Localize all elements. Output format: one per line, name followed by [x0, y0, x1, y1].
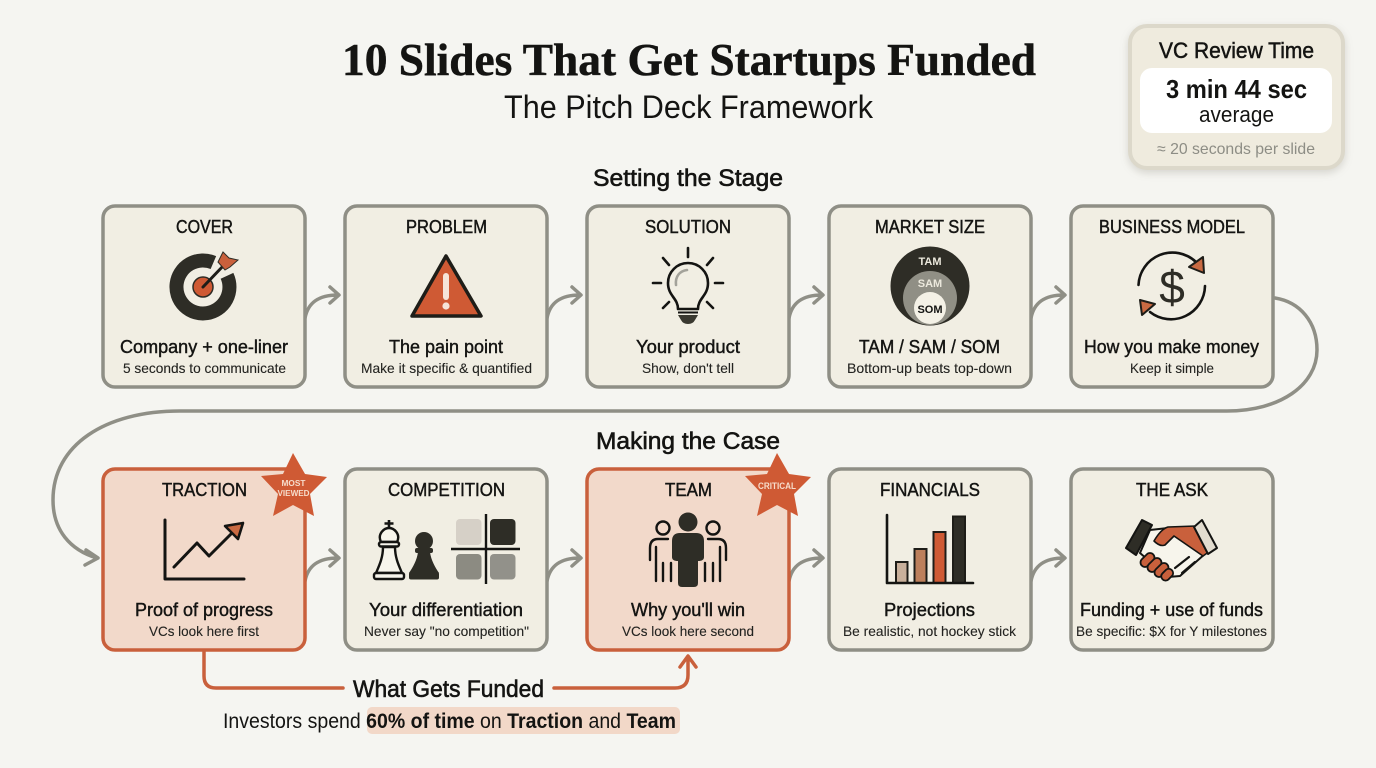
- icon: TAM SAM SOM nested circles: SAM: [918, 278, 942, 290]
- heading: what gets funded: What Gets Funded: [353, 676, 544, 703]
- badge: most viewed star: MOST: [282, 479, 306, 488]
- badge: critical star: CRITICAL: [758, 481, 796, 491]
- panel: cover: [103, 206, 305, 387]
- subtitle: The Pitch Deck Framework: [504, 89, 874, 125]
- panel: team: [587, 453, 811, 650]
- icon: bar chart: [887, 515, 973, 583]
- icon: dollar cycle: $: [1159, 261, 1185, 313]
- arrow: solution to market size: [789, 287, 823, 318]
- icon: growth chart: [165, 520, 244, 579]
- card heading: FINANCIALS: [880, 480, 980, 500]
- icon: chess pieces: [374, 520, 439, 580]
- icon: team people: [650, 512, 726, 587]
- callout heading: VC Review Time: [1159, 38, 1314, 63]
- card heading: MARKET SIZE: [875, 217, 985, 237]
- card statement: Your product: [636, 337, 740, 357]
- callout value panel: [1140, 68, 1332, 133]
- card note: VCs look here second: [622, 623, 754, 639]
- panel: competition: [345, 469, 547, 650]
- arrow: market size to business model: [1031, 287, 1065, 318]
- callout: VC review time: [1130, 26, 1343, 168]
- panel: solution: [587, 206, 789, 387]
- card statement: Projections: [884, 600, 975, 620]
- highlight: investor time share: Investors spend 60% of time on Traction and Team: [223, 710, 676, 733]
- icon: dollar cycle: [1138, 253, 1205, 319]
- card note: Be realistic, not hockey stick: [843, 623, 1017, 639]
- badge: most viewed star: VIEWED: [278, 489, 310, 498]
- panel: market size: [829, 206, 1031, 387]
- arrow: traction to competition: [305, 550, 339, 581]
- card heading: TEAM: [665, 480, 712, 500]
- card statement: Your differentiation: [369, 600, 523, 620]
- panel: financials: [829, 469, 1031, 650]
- arrow: cover to problem: [305, 287, 339, 318]
- arrow: problem to solution: [547, 287, 581, 318]
- card heading: BUSINESS MODEL: [1099, 217, 1245, 237]
- card statement: TAM / SAM / SOM: [859, 337, 1000, 357]
- icon: TAM SAM SOM nested circles: SOM: [917, 304, 943, 316]
- panel: the ask: [1071, 469, 1273, 650]
- card heading: TRACTION: [162, 480, 247, 500]
- icon: target with arrow: [176, 252, 238, 313]
- section heading: setting the stage: Setting the Stage: [593, 165, 783, 192]
- review time value: 3 min 44 sec: [1166, 74, 1307, 104]
- card note: Keep it simple: [1130, 360, 1214, 376]
- badge: critical star: [745, 453, 811, 516]
- card note: Be specific: $X for Y milestones: [1076, 623, 1267, 639]
- icon: TAM SAM SOM nested circles: [890, 246, 970, 326]
- card heading: COVER: [176, 217, 233, 237]
- card heading: SOLUTION: [645, 217, 731, 237]
- average label: average: [1199, 102, 1274, 127]
- card statement: Company + one-liner: [120, 337, 288, 357]
- card note: Bottom-up beats top-down: [847, 360, 1012, 376]
- panel: business model: [1071, 206, 1273, 387]
- arrow: competition to team: [547, 550, 581, 581]
- card statement: Funding + use of funds: [1080, 600, 1263, 620]
- card note: Never say "no competition": [364, 623, 529, 639]
- arrow: traction to team bracket: [204, 652, 696, 688]
- title: 10 Slides That Get Startups Funded: [342, 34, 1036, 85]
- card heading: PROBLEM: [406, 217, 487, 237]
- icon: TAM SAM SOM nested circles: TAM: [918, 256, 942, 268]
- card heading: COMPETITION: [388, 480, 505, 500]
- badge: most viewed star: [261, 453, 327, 516]
- card statement: The pain point: [389, 337, 503, 357]
- arrow: row wrap connector: [53, 298, 1317, 565]
- per slide note: ≈ 20 seconds per slide: [1157, 141, 1315, 158]
- card statement: Why you'll win: [631, 600, 745, 620]
- icon: handshake: [1126, 520, 1217, 582]
- panel: traction: [103, 453, 327, 650]
- card note: VCs look here first: [149, 623, 259, 639]
- arrow: team to financials: [789, 550, 823, 581]
- card heading: THE ASK: [1136, 480, 1208, 500]
- arrow: financials to the ask: [1031, 550, 1065, 581]
- panel: problem: [345, 206, 547, 387]
- card note: Show, don't tell: [642, 360, 734, 376]
- card statement: Proof of progress: [135, 600, 273, 620]
- card statement: How you make money: [1084, 337, 1259, 357]
- card note: Make it specific & quantified: [361, 360, 532, 376]
- icon: positioning matrix: [451, 514, 520, 584]
- card note: 5 seconds to communicate: [123, 360, 286, 376]
- section heading: making the case: Making the Case: [596, 428, 780, 455]
- icon: light bulb: [653, 248, 723, 324]
- icon: warning triangle: [412, 256, 481, 316]
